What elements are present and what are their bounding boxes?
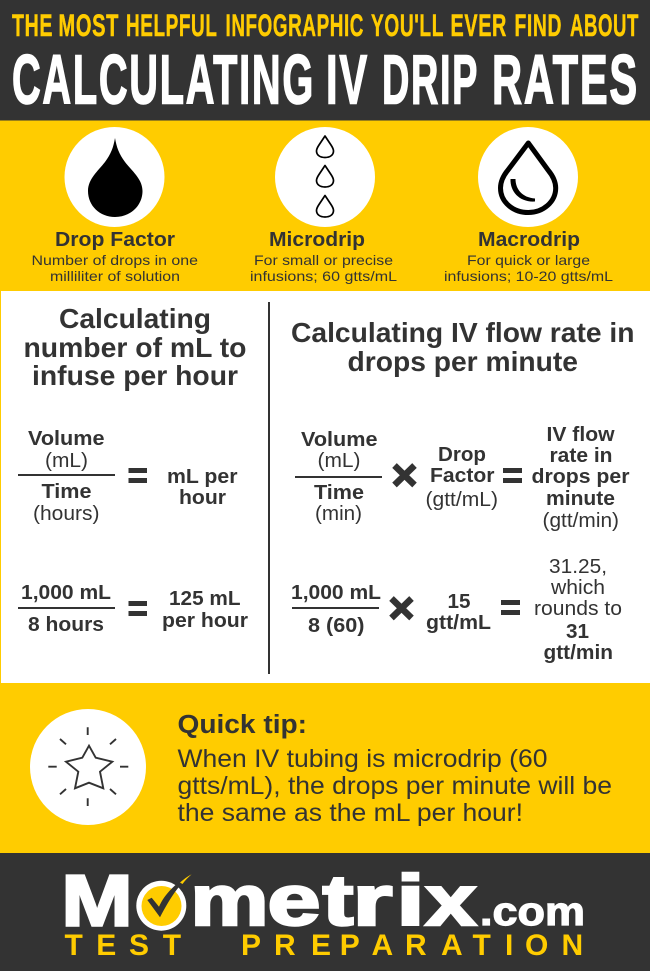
description: drop factor: Number of drops in one [32,252,198,268]
quick tip text: gtts/mL), the drops per minute will be [178,772,612,800]
formula: mL per hour: (mL) [45,450,88,472]
panel: footer logo [0,853,650,971]
heading: mL per hour: infuse per hour [32,360,238,391]
quick tip heading: Quick tip: [178,711,307,739]
label: drop factor: Drop Factor [55,229,175,251]
formula: drops per minute [295,424,630,532]
formula: mL per hour: mL per [167,466,238,488]
formula: drops per minute: drops per [532,466,630,488]
example: drops per minute: 15 [448,591,470,613]
kicker heading: EVER [450,7,507,43]
definition: drop factor [32,127,198,284]
heading: mL per hour: Calculating [59,303,211,334]
example: mL per hour: 125 mL [169,588,240,610]
formula: mL per hour: Volume [28,428,104,450]
kicker heading: FIND [514,7,562,43]
logo wordmark [61,862,585,942]
kicker heading: YOU'LL [371,7,444,43]
logo wordmark: M [61,862,133,942]
example: mL per hour: 8 hours [28,614,104,636]
heading: mL per hour [24,303,246,391]
formula: drops per minute: (gtt/min) [542,510,619,532]
example: drops per minute: rounds to [534,598,622,620]
icon: outlined drop [500,143,556,212]
logo wordmark: x [425,862,476,941]
logo wordmark: m [190,862,268,941]
panel: definitions [0,120,650,291]
formula: mL per hour [18,428,238,525]
label: macrodrip: Macrodrip [478,229,580,251]
heading: drops per minute: drops per minute [348,346,578,377]
logo tagline: PREPARATION [241,929,583,962]
formula: drops per minute: rate in [550,445,612,467]
label: microdrip: Microdrip [269,229,365,251]
formula: drops per minute: (mL) [318,450,360,472]
quick tip text: the same as the mL per hour! [178,799,523,827]
main title: DRIP [382,40,479,118]
heading: drops per minute [291,317,634,377]
example: drops per minute: gtt/mL [426,612,491,634]
kicker heading: MOST [58,7,119,43]
definition: macrodrip [444,127,613,284]
icon: three small drops [316,136,334,217]
panel: quick tip [0,683,650,853]
formula: mL per hour: (hours) [33,503,100,525]
definition: microdrip [250,127,397,284]
logo tagline [64,929,583,962]
description: microdrip: infusions; 60 gtts/mL [250,268,397,284]
description: microdrip [250,252,397,284]
logo check mark [136,874,192,931]
logo wordmark: e [268,862,320,941]
example: drops per minute: which [550,577,605,599]
quick tip text [178,745,612,827]
icon: star [48,727,128,806]
logo tagline: TEST [64,929,181,962]
formula: drops per minute: Volume [301,429,378,451]
icon: solid drop [88,138,142,217]
example: drops per minute: gtt/min [544,642,613,664]
heading: drops per minute: Calculating IV flow rate in [291,317,634,348]
main title: CALCULATING [12,40,315,118]
logo wordmark: r [352,862,392,941]
formula: mL per hour: Time [42,481,92,503]
description: macrodrip: infusions; 10-20 gtts/mL [444,268,613,284]
kicker heading: THE [12,7,53,43]
formula: mL per hour: hour [179,487,226,509]
example: drops per minute: 1,000 mL [291,582,381,604]
example: drops per minute: 31.25, [549,556,607,578]
description: drop factor: milliliter of solution [50,268,180,284]
example: drops per minute [291,556,622,664]
formula: drops per minute: Time [314,482,364,504]
formula: drops per minute: (min) [315,503,362,525]
heading: mL per hour: number of mL to [24,332,246,363]
example: drops per minute: 8 (60) [308,615,364,637]
main title: IV [326,40,369,118]
example: mL per hour: per hour [162,610,248,632]
formula: drops per minute: (gtt/mL) [426,489,498,511]
panel: header [0,0,650,120]
kicker heading [12,7,639,43]
formula: drops per minute: Factor [430,465,495,487]
kicker heading: HELPFUL [126,7,218,43]
kicker heading: INFOGRAPHIC [226,7,364,43]
logo wordmark: i [396,862,425,941]
example: mL per hour [18,582,248,636]
logo wordmark: .com [480,890,585,934]
example: mL per hour: 1,000 mL [21,582,111,604]
panel: formulas [0,291,650,683]
description: microdrip: For small or precise [254,252,393,268]
example: drops per minute: 31 [566,621,589,643]
formula: drops per minute: minute [546,488,615,510]
description: drop factor [32,252,198,284]
formula: drops per minute: IV flow [546,424,615,446]
quick tip text: When IV tubing is microdrip (60 [178,745,548,773]
logo wordmark: t [322,862,354,941]
formula: drops per minute: Drop [438,444,486,466]
description: macrodrip: For quick or large [467,252,590,268]
description: macrodrip [444,252,613,284]
